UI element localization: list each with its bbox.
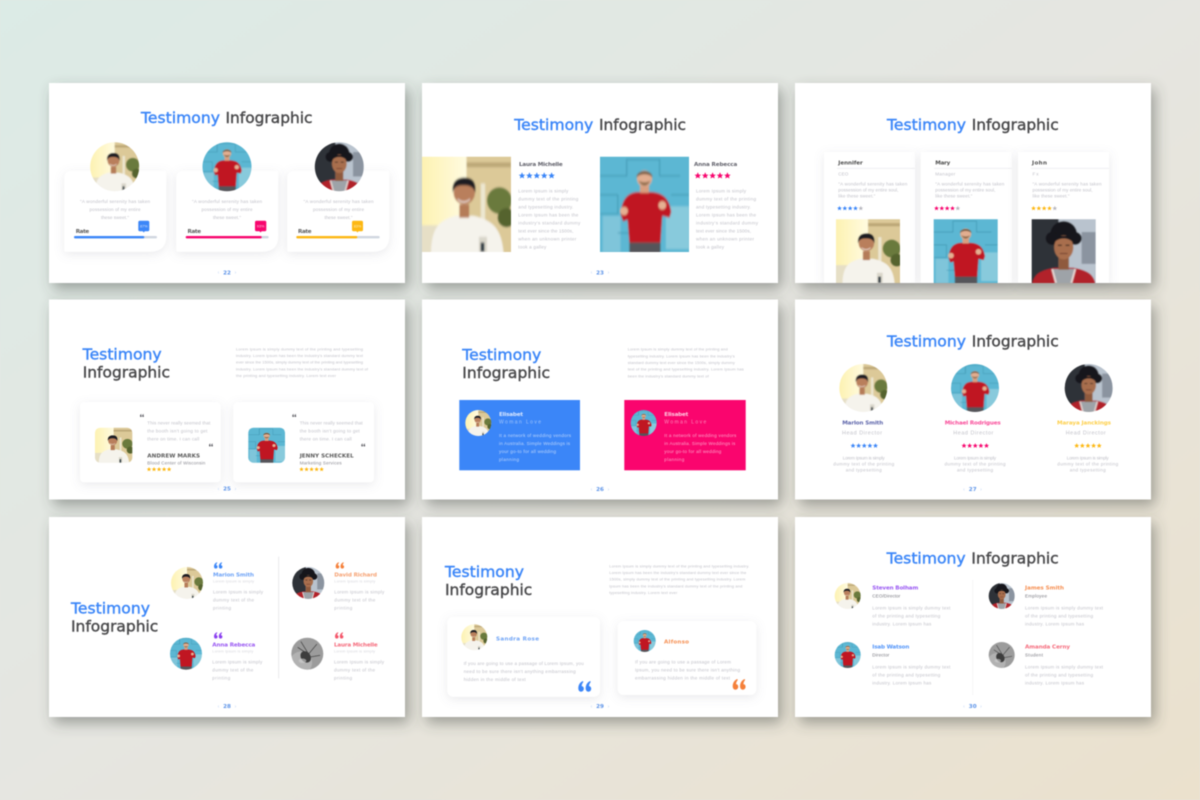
card: Jennifer: possession of my entire soul, xyxy=(838,188,898,193)
testimonial: Anna Rebecca: Lorem Ipsum is simply xyxy=(696,189,747,194)
card: John: John xyxy=(1031,160,1047,166)
card: Alfonso: Ipsum, you need to be sure there isn't anything xyxy=(635,668,740,673)
heading: Infographic xyxy=(445,581,532,599)
testimonial: Anna Rebecca: Lorem Ipsum is simply xyxy=(212,650,253,654)
profile: Marlon Smith xyxy=(833,362,895,473)
testimonial: Laura Michelle: Laura Michelle xyxy=(519,162,563,168)
intro text: industry. Lorem Ipsum has been the industry's standard dummy text of xyxy=(236,366,369,371)
card: Andrew Marks: the booth isn't going to get xyxy=(147,428,208,433)
panel: slide 26 xyxy=(422,300,778,500)
card: Sandra Rose: need to be sure there isn't anything embarrassing xyxy=(464,669,576,674)
testimonial: Isab Watson: of the printing and typesetting xyxy=(872,673,941,678)
page number: 28 xyxy=(223,704,231,710)
card: Elisabet blue: Elisabet xyxy=(499,412,523,418)
heading xyxy=(70,599,158,635)
profile: Michael Rodrigues: and typesetting xyxy=(957,468,993,473)
profile: Michael Rodrigues: Head Director xyxy=(953,430,994,436)
card: rate 1: 87% xyxy=(140,224,148,228)
heading: Infographic xyxy=(462,364,550,382)
photo: Anna Rebecca xyxy=(596,152,693,257)
page number: ‹ xyxy=(218,704,220,710)
profile: Marlon Smith: dummy text of the printing xyxy=(833,462,895,467)
card: Jennifer: "A wonderful serenity has taken xyxy=(838,182,908,187)
card: rate 3 xyxy=(287,140,389,252)
testimonial: James Smith: of the printing and typesetting xyxy=(1025,613,1093,618)
panel: slide 27 xyxy=(795,300,1151,500)
testimonial: Anna Rebecca: Anna Rebecca xyxy=(694,162,738,168)
card: Elisabet pink: planning xyxy=(664,457,685,462)
page number: 26 xyxy=(596,487,604,493)
card: rate 2: "A wonderful serenity has taken xyxy=(192,199,262,204)
heading xyxy=(82,345,170,381)
profile: Marlon Smith: Head Director xyxy=(842,430,882,436)
panel: slide 28 xyxy=(49,517,405,717)
card: Elisabet blue: It a network of wedding vendors xyxy=(499,433,572,438)
testimonial: Steven Bolham: Steven Bolham xyxy=(872,585,918,591)
card: Jenny Scheckel: This never really seemed that xyxy=(300,420,363,425)
heading xyxy=(513,116,686,134)
card: Jenny Scheckel: there on time. I can call xyxy=(300,436,352,441)
card: Mary: like these sweet." xyxy=(935,194,973,199)
card: Elisabet blue: your go-to for all wedding xyxy=(499,449,556,454)
testimonial: Steven Bolham: industry. Lorem Ipsum has xyxy=(872,621,932,626)
card: rate 2 xyxy=(176,140,278,252)
profile: Marlon Smith: and typesetting xyxy=(846,468,882,473)
card: John xyxy=(1018,152,1109,286)
page number: ‹ xyxy=(963,487,965,493)
page number: › xyxy=(608,487,610,493)
testimonial: Marion Smith: dummy text of the xyxy=(213,598,254,603)
intro text xyxy=(236,346,369,378)
heading xyxy=(886,333,1059,351)
intro text: Lorem Ipsum has been the industry's standard dummy text ever since the xyxy=(609,570,747,575)
testimonial: David Richard: printing xyxy=(334,606,353,611)
panel: slide 22 xyxy=(49,83,405,283)
card: Andrew Marks xyxy=(80,402,221,482)
panel: slide 24 xyxy=(795,83,1151,286)
card: rate 1: Rate xyxy=(76,229,89,235)
card: Elisabet pink: your go-to for all wedding xyxy=(664,449,722,454)
panel: slide 23 xyxy=(418,83,778,283)
intro text: text of the printing and typesetting industry. Lorem Ipsum has xyxy=(628,367,744,372)
testimonial: Anna Rebecca: dummy text of the xyxy=(212,668,254,673)
page number xyxy=(218,486,237,493)
page number: › xyxy=(235,270,237,276)
testimonial: Steven Bolham: of the printing and typesetting xyxy=(872,613,941,618)
card: Jenny Scheckel xyxy=(233,402,374,482)
heading: Testimony xyxy=(513,116,593,134)
page number xyxy=(963,487,982,493)
testimonial: Laura Michelle: Lorem Ipsum is simply xyxy=(334,650,375,654)
testimonial: Laura Michelle: printing xyxy=(334,676,352,681)
card: Mary: possession of my entire soul, xyxy=(935,188,995,193)
intro text: Lorem Ipsum is simply dummy text of the printing and typesetting industry. xyxy=(609,563,749,568)
testimonial: Anna Rebecca: text ever since the 1500s, xyxy=(696,229,751,234)
testimonial: James Smith: Lorem Ipsum is simply dummy text xyxy=(1025,605,1104,610)
card: Mary: Mary xyxy=(935,160,951,166)
card: rate 2: possession of my entire xyxy=(202,207,253,212)
page number: ‹ xyxy=(591,487,593,493)
intro text: the printing and typesetting industry. Lorem text ever xyxy=(236,373,337,378)
testimonial: Laura Michelle: took a galley xyxy=(518,245,547,250)
testimonial: Laura Michelle xyxy=(518,162,581,250)
card: rate 1: "A wonderful serenity has taken xyxy=(80,199,150,204)
heading: Testimony xyxy=(444,563,524,581)
card: rate 1: these sweet." xyxy=(101,215,129,220)
heading: Testimony xyxy=(461,346,541,364)
page number xyxy=(963,704,982,710)
card: Andrew Marks: ANDREW MARKS xyxy=(147,454,200,460)
card: Mary xyxy=(921,152,1012,286)
testimonial: Laura Michelle: when an unknown printer xyxy=(518,237,577,242)
testimonial: Laura Michelle: text ever since the 1500s, xyxy=(518,229,573,234)
page number: 23 xyxy=(596,270,604,276)
testimonial: Steven Bolham: CEO/Director xyxy=(872,593,901,598)
profile: Maraya Janckings: Maraya Janckings xyxy=(1057,420,1112,426)
page number: ‹ xyxy=(218,270,220,276)
testimonial: Laura Michelle: Laura Michelle xyxy=(334,642,378,648)
testimonial: Anna Rebecca: Lorem Ipsum is simply xyxy=(212,660,263,665)
page number: ‹ xyxy=(591,704,593,710)
testimonial: Anna Rebecca: and typesetting industry. xyxy=(696,205,751,210)
card: Jennifer: Jennifer xyxy=(837,160,863,166)
page number: › xyxy=(235,704,237,710)
card: rate 3: Rate xyxy=(298,229,312,235)
page number: ‹ xyxy=(591,270,593,276)
photo: Laura Michelle xyxy=(418,152,515,257)
testimonial: Laura Michelle: dummy text of the printing xyxy=(518,197,579,202)
testimonial: Anna Rebecca: Anna Rebecca xyxy=(212,642,256,648)
testimonial: Anna Rebecca: printing xyxy=(212,676,231,681)
testimonial: Isab Watson: industry. Lorem Ipsum has xyxy=(872,681,932,686)
card: Jenny Scheckel: the booth isn't going to get xyxy=(300,428,360,433)
card: rate 2: Rate xyxy=(188,229,201,235)
card: Elisabet blue: Woman Love xyxy=(499,420,541,426)
card: Andrew Marks: there on time. I can call xyxy=(147,436,199,441)
card: Elisabet pink: It a network of wedding vendors xyxy=(664,433,737,438)
card: rate 2: these sweet." xyxy=(213,215,241,220)
heading: Testimony xyxy=(140,109,220,127)
testimonial: David Richard: Lorem Ipsum is simply xyxy=(334,580,375,584)
card: Elisabet blue: in Australia. Simple Weddings is xyxy=(499,441,571,446)
card: Jennifer xyxy=(824,152,915,286)
panel: slide 25 xyxy=(49,300,405,500)
testimonial: Isab Watson xyxy=(833,641,951,686)
card: Elisabet pink xyxy=(624,400,746,470)
testimonial: David Richard: Lorem Ipsum is simply xyxy=(334,590,385,595)
page number: ‹ xyxy=(218,486,220,492)
testimonial: Anna Rebecca: when an unknown printer xyxy=(696,237,754,242)
testimonial: Amanda Cerny: of the printing and typesetting xyxy=(1025,673,1093,678)
testimonial: Amanda Cerny: industry. Lorem Ipsum has xyxy=(1025,681,1085,686)
heading: Infographic xyxy=(972,116,1059,134)
intro text: Lorem Ipsum is simply dummy text of the printing and xyxy=(628,347,728,352)
profile: Marlon Smith: Marlon Smith xyxy=(842,420,883,426)
page number xyxy=(218,704,237,710)
card: rate 2: 93% xyxy=(257,224,265,228)
heading: Testimony xyxy=(70,599,150,617)
heading xyxy=(140,109,312,127)
testimonial: Anna Rebecca: dummy text of the printing xyxy=(696,197,756,202)
page number: 27 xyxy=(969,487,977,493)
testimonial: Laura Michelle: dummy text of the xyxy=(334,668,375,673)
card: Jenny Scheckel: JENNY SCHECKEL xyxy=(299,454,354,460)
testimonial: Anna Rebecca: took a galley xyxy=(696,245,725,250)
card: Alfonso: Alfonso xyxy=(664,640,689,646)
testimonial: Marion Smith: printing xyxy=(213,606,231,611)
testimonial: Laura Michelle: and typesetting industry. xyxy=(518,205,573,210)
card: Jennifer: like these sweet." xyxy=(838,194,876,199)
card: Elisabet pink: Woman Love xyxy=(664,420,707,426)
testimonial: Steven Bolham xyxy=(833,582,951,626)
testimonial: Steven Bolham: Lorem Ipsum is simply dummy text xyxy=(872,605,951,610)
panel: slide 29 xyxy=(422,517,778,717)
intro text: Ipsum has been the industry's standard dummy text of the printing and xyxy=(609,583,742,588)
profile: Maraya Janckings: dummy text of the printing xyxy=(1057,462,1119,467)
card: Elisabet pink: in Australia. Simple Weddings is xyxy=(664,441,736,446)
page number: ‹ xyxy=(963,704,965,710)
intro text xyxy=(609,563,749,595)
heading: Infographic xyxy=(972,333,1059,351)
heading: Infographic xyxy=(971,550,1059,568)
page number: › xyxy=(235,486,237,492)
intro text: been the industry's standard dummy text of xyxy=(628,373,710,378)
testimonial: Anna Rebecca: industry's standard dummy xyxy=(696,221,759,226)
heading: Infographic xyxy=(599,116,686,134)
card: Andrew Marks: Blood Center of Wisconsin xyxy=(147,460,206,465)
testimonial: Isab Watson: Lorem Ipsum is simply dummy text xyxy=(872,665,951,670)
page number xyxy=(591,487,610,493)
testimonial: Marion Smith xyxy=(169,562,264,611)
intro text: standard dummy text ever since the 1500s, simply dummy xyxy=(628,360,735,365)
testimonial: Laura Michelle xyxy=(290,632,385,681)
heading: Testimony xyxy=(82,345,162,363)
intro text: ever since the 1500s, simply dummy text of the printing and typesetting xyxy=(236,360,363,365)
card: rate 3: 83% xyxy=(354,224,362,228)
profile: Maraya Janckings: and typesetting xyxy=(1070,468,1106,473)
profile: Marlon Smith: Lorem Ipsum is simply xyxy=(843,456,885,461)
card: John: Fx xyxy=(1032,172,1039,177)
testimonial: David Richard xyxy=(291,562,385,611)
page number: › xyxy=(980,487,982,493)
profile: Michael Rodrigues: Michael Rodrigues xyxy=(945,420,1001,426)
profile: Michael Rodrigues: Lorem Ipsum is simply xyxy=(954,456,997,461)
card: Sandra Rose xyxy=(447,617,600,697)
panel: slide 30 xyxy=(795,517,1151,717)
testimonial: David Richard: David Richard xyxy=(334,572,377,578)
card: Elisabet blue xyxy=(459,400,580,470)
testimonial: Marion Smith: Lorem Ipsum is simply xyxy=(213,590,264,595)
profile: Maraya Janckings: Head Director xyxy=(1066,430,1106,436)
card: rate 1 xyxy=(64,140,166,252)
page number xyxy=(591,270,610,276)
profile: Maraya Janckings xyxy=(1057,362,1119,473)
card: rate 3: these sweet." xyxy=(324,215,353,220)
heading xyxy=(444,563,532,599)
card: Andrew Marks: This never really seemed that xyxy=(147,420,211,425)
card: Sandra Rose: If you are going to use a passage of Lorem Ipsum, you xyxy=(464,661,584,666)
card: Sandra Rose: hidden in the middle of text xyxy=(464,677,526,682)
card: Alfonso: embarrassing hidden in the middle of text xyxy=(635,676,731,681)
testimonial: Anna Rebecca xyxy=(694,162,759,250)
testimonial: Laura Michelle: Lorem Ipsum is simply xyxy=(518,189,569,194)
testimonial: Laura Michelle: Lorem Ipsum is simply xyxy=(334,660,385,665)
card: Elisabet pink: Elisabet xyxy=(664,412,689,418)
testimonial: Laura Michelle: Lorem Ipsum has been the xyxy=(518,213,579,218)
profile: Michael Rodrigues: dummy text of the printing xyxy=(944,462,1006,467)
heading: Testimony xyxy=(886,116,966,134)
intro text: industry. Lorem Ipsum has been the industry's standard dummy text xyxy=(236,353,364,358)
intro text xyxy=(628,347,744,378)
testimonial: Anna Rebecca xyxy=(168,632,263,681)
heading: Infographic xyxy=(226,109,312,127)
testimonial: Marion Smith: Lorem Ipsum is simply xyxy=(213,580,254,584)
card: John: "A wonderful serenity has taken xyxy=(1032,182,1102,187)
card: John: like these sweet." xyxy=(1032,194,1070,199)
page number xyxy=(591,704,610,710)
intro text: typesetting industry. Lorem text ever xyxy=(609,590,678,595)
card: rate 3: "A wonderful serenity has taken xyxy=(304,199,374,204)
page number: 25 xyxy=(223,487,231,493)
page number: › xyxy=(608,704,610,710)
page number: › xyxy=(980,704,982,710)
testimonial: Amanda Cerny: Student xyxy=(1025,653,1044,658)
testimonial: Isab Watson: Director xyxy=(872,653,890,658)
testimonial: James Smith xyxy=(987,582,1104,626)
card: Jenny Scheckel: Marketing Services xyxy=(300,460,342,465)
card: Mary: Manager xyxy=(935,172,956,177)
card: Elisabet blue: planning xyxy=(499,457,519,462)
card: Sandra Rose: Sandra Rose xyxy=(496,636,539,642)
testimonial: Amanda Cerny xyxy=(987,641,1104,686)
intro text: 1500s, simply dummy text of the printing and typesetting industry. Lorem xyxy=(609,577,746,582)
card: rate 1: possession of my entire xyxy=(90,207,141,212)
testimonial: Isab Watson: Isab Watson xyxy=(872,645,909,651)
heading xyxy=(461,346,550,382)
profile: Maraya Janckings: Lorem Ipsum is simply xyxy=(1067,456,1109,461)
testimonial: David Richard: dummy text of the xyxy=(334,598,376,603)
heading xyxy=(886,116,1059,134)
intro text: Lorem Ipsum is simply dummy text of the printing and typesetting xyxy=(236,346,363,351)
intro text: typesetting industry. Lorem Ipsum has been the industry's xyxy=(628,353,735,358)
page number: 30 xyxy=(969,704,977,710)
testimonial: Amanda Cerny: Lorem Ipsum is simply dummy text xyxy=(1025,665,1104,670)
testimonial: Laura Michelle: industry's standard dummy xyxy=(518,221,581,226)
card: Alfonso: If you are going to use a passage of Lorem xyxy=(635,660,731,665)
card: Jennifer: CEO xyxy=(838,172,849,177)
profile: Michael Rodrigues xyxy=(944,362,1006,473)
card: rate 3: possession of my entire xyxy=(313,207,364,212)
heading: Infographic xyxy=(71,617,158,635)
heading: Infographic xyxy=(83,363,170,381)
testimonial: Anna Rebecca: Lorem Ipsum has been the xyxy=(696,213,756,218)
heading: Testimony xyxy=(886,333,966,351)
heading xyxy=(886,550,1059,568)
card: Mary: "A wonderful serenity has taken xyxy=(935,182,1005,187)
page number: 29 xyxy=(596,704,604,710)
testimonial: Marion Smith: Marion Smith xyxy=(213,572,254,578)
page number: 22 xyxy=(223,270,231,276)
testimonial: James Smith: industry. Lorem Ipsum has xyxy=(1025,621,1085,626)
testimonial: Amanda Cerny: Amanda Cerny xyxy=(1025,645,1070,651)
card: John: possession of my entire soul, xyxy=(1032,188,1092,193)
heading: Testimony xyxy=(886,550,966,568)
testimonial: James Smith: Employee xyxy=(1025,593,1047,598)
page number: › xyxy=(608,270,610,276)
page number xyxy=(218,270,237,276)
testimonial: James Smith: James Smith xyxy=(1024,585,1064,591)
card: Alfonso xyxy=(618,621,756,695)
